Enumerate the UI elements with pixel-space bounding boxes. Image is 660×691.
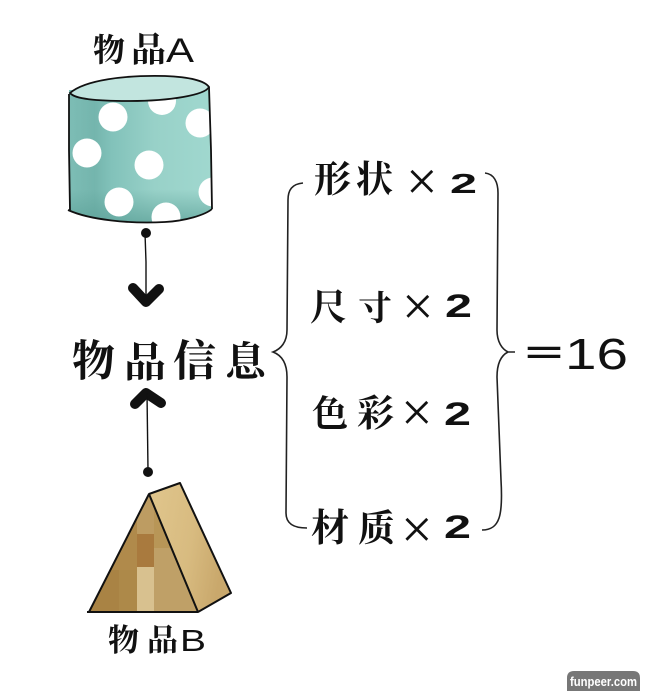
icon: wooden triangular prism (item B) bbox=[87, 483, 231, 612]
heading: item A bbox=[93, 23, 194, 73]
row: size times 2 bbox=[310, 276, 472, 338]
result: equals 16: 16 bbox=[565, 330, 628, 379]
left brace bbox=[273, 183, 307, 528]
arrow: from item A down to info bbox=[133, 228, 159, 302]
heading: item B bbox=[108, 615, 206, 660]
heading: item A: 品 bbox=[131, 23, 166, 73]
row: shape times 2: 形 bbox=[314, 149, 351, 203]
row: material times 2 bbox=[311, 497, 471, 561]
right brace bbox=[482, 173, 515, 530]
row: material times 2: 2 bbox=[444, 509, 471, 545]
row: material times 2: 质 bbox=[358, 498, 395, 552]
row: colour times 2: 2 bbox=[444, 396, 471, 432]
row: material times 2: × bbox=[401, 499, 433, 561]
heading: item B: 品 bbox=[147, 615, 178, 660]
heading: item A: A bbox=[166, 32, 194, 70]
heading: item information: 物 bbox=[72, 328, 115, 389]
heading: item B: 物 bbox=[108, 615, 139, 660]
heading: item A: 物 bbox=[93, 25, 125, 71]
result: equals 16 bbox=[525, 330, 628, 379]
row: colour times 2: 彩 bbox=[357, 383, 394, 437]
row: colour times 2: × bbox=[401, 382, 433, 444]
heading: item information: 信 bbox=[173, 328, 216, 389]
row: shape times 2: 状 bbox=[356, 149, 394, 203]
arrow: from item B up to info bbox=[135, 393, 161, 477]
row: size times 2: 寸 bbox=[358, 281, 392, 330]
row: size times 2: 2 bbox=[445, 288, 472, 324]
row: shape times 2 bbox=[314, 149, 477, 213]
row: size times 2: × bbox=[402, 276, 434, 338]
heading: item information: 品 bbox=[124, 330, 166, 390]
heading: item information: 息 bbox=[225, 329, 269, 388]
row: shape times 2: × bbox=[406, 151, 438, 213]
row: colour times 2 bbox=[312, 382, 471, 444]
row: colour times 2: 色 bbox=[312, 386, 348, 437]
watermark bbox=[567, 671, 640, 691]
watermark: funpeer.com bbox=[570, 675, 637, 689]
result: equals 16: = bbox=[525, 336, 563, 369]
heading: item information bbox=[72, 328, 269, 390]
heading: item B: B bbox=[180, 623, 206, 658]
row: shape times 2: 2 bbox=[450, 168, 477, 199]
row: size times 2: 尺 bbox=[310, 277, 347, 331]
row: material times 2: 材 bbox=[311, 497, 349, 552]
icon: polka dot cylinder (item A) bbox=[68, 75, 213, 224]
